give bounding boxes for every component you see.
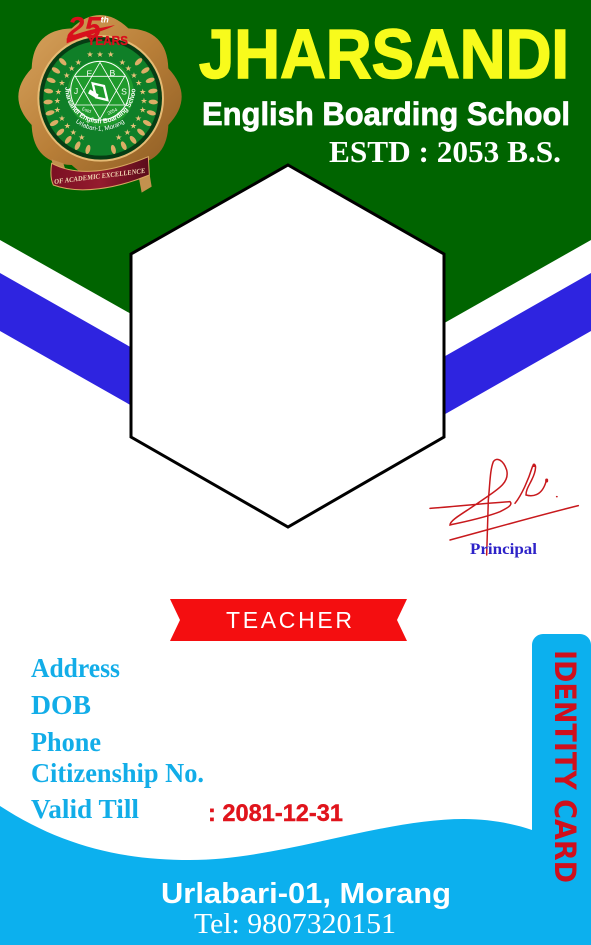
identity card side tab: IDENTITY CARD <box>548 650 582 883</box>
personal details labels: Phone <box>31 727 101 757</box>
school logo seal <box>18 11 182 193</box>
principal signature <box>430 459 578 555</box>
ring of stars: ★ <box>70 128 77 137</box>
maroon ribbon: OF ACADEMIC EXCELLENCE <box>54 167 146 186</box>
emblem letters <box>74 68 127 97</box>
role ribbon: teacher: TEACHER <box>226 607 352 633</box>
identity card side tab <box>532 634 591 894</box>
ring of stars: ★ <box>58 114 66 123</box>
established year: ESTD : 2053 B.S. <box>329 134 561 169</box>
ring of stars: ★ <box>130 122 137 131</box>
ring of stars: ★ <box>139 106 146 115</box>
emblem letters: S <box>121 87 127 97</box>
ring of stars: ★ <box>140 97 148 106</box>
ring of stars: ★ <box>125 64 132 73</box>
ring of stars: ★ <box>135 114 142 123</box>
principal label: Principal <box>470 541 538 558</box>
emblem letters: B <box>109 68 115 78</box>
role ribbon: teacher <box>170 599 407 641</box>
green header banner <box>0 0 591 407</box>
open book icon <box>88 83 107 100</box>
25th years mark: th <box>101 15 109 25</box>
personal details labels: Citizenship No. <box>31 758 204 788</box>
ring of stars: ★ <box>115 133 122 142</box>
personal details labels: DOB <box>31 690 91 720</box>
seal rings <box>37 35 164 162</box>
curved school name <box>65 87 136 132</box>
ring of stars: ★ <box>124 128 131 137</box>
ring of stars: ★ <box>107 50 114 59</box>
scalloped gold badge <box>18 15 182 178</box>
emblem letters: J <box>74 86 78 96</box>
ring of stars: ★ <box>75 58 82 67</box>
ring of stars: ★ <box>139 87 146 96</box>
ring of stars: ★ <box>58 78 66 87</box>
ring of stars: ★ <box>55 87 62 96</box>
25th years mark <box>67 11 128 48</box>
ring of stars: ★ <box>54 106 61 115</box>
ring of stars: ★ <box>54 97 61 106</box>
validity date: : 2081-12-31 <box>208 800 343 827</box>
footer address: Urlabari-01, Morang <box>161 878 451 910</box>
ring of stars: ★ <box>86 50 94 59</box>
personal details labels <box>31 653 204 824</box>
ring of stars: ★ <box>63 71 70 80</box>
ring of stars: ★ <box>130 71 138 80</box>
ring of stars <box>54 50 148 142</box>
ring of stars: ★ <box>135 78 142 87</box>
25th years mark: YEARS <box>87 34 128 48</box>
ring of stars: ★ <box>68 64 75 73</box>
curved school name: Urlabari-1, Morang <box>76 119 125 132</box>
curved school name: Estd <box>81 106 92 114</box>
emblem letters: E <box>86 69 92 79</box>
ring of stars: ★ <box>78 133 85 142</box>
ring of stars: ★ <box>119 58 126 67</box>
blue diagonal band <box>0 273 591 499</box>
personal details labels: Valid Till <box>31 794 140 824</box>
hexagon photo frame <box>131 165 444 527</box>
footer telephone: Tel: 9807320151 <box>194 909 396 940</box>
cyan wave footer <box>0 806 591 945</box>
25th years mark: 25 <box>67 11 102 45</box>
subtitle: English Boarding School: English Boarding School <box>202 96 570 132</box>
ring of stars: ★ <box>96 50 104 59</box>
laurel wreath <box>43 57 158 155</box>
personal details labels: Address <box>31 653 120 683</box>
ring of stars: ★ <box>64 122 71 131</box>
star of david emblem <box>71 61 129 120</box>
curved school name: 2054 <box>107 107 119 116</box>
maroon ribbon <box>51 157 152 193</box>
